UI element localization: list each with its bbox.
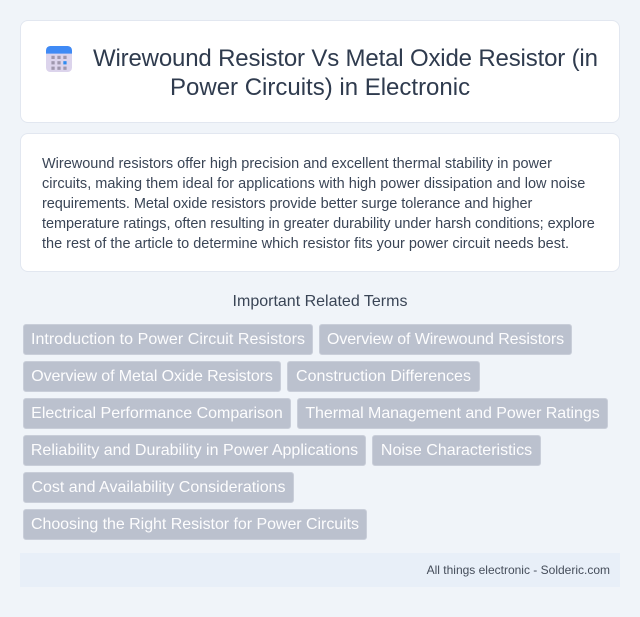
footer text: All things electronic - Solderic.com xyxy=(427,563,610,577)
panel: related term tags xyxy=(23,324,608,540)
icon: calendar grid xyxy=(46,46,72,72)
text block: description: requirements. Metal oxide resistors provide better surge tolerance and higher xyxy=(42,196,532,212)
title: Wirewound Resistor Vs Metal Oxide Resistor (in xyxy=(93,45,598,72)
heading: related terms: Important Related Terms xyxy=(233,293,407,310)
tag xyxy=(297,398,608,429)
tag xyxy=(23,361,281,392)
tag: Overview of Wirewound Resistors xyxy=(327,331,564,348)
tag: Overview of Metal Oxide Resistors xyxy=(31,368,273,385)
text block: description: temperature ratings, often resulting in greater durability under harsh conditions; explore xyxy=(42,216,595,232)
tag xyxy=(372,435,541,466)
text block: description: Wirewound resistors offer high precision and excellent thermal stability in power xyxy=(42,156,552,172)
tag: Cost and Availability Considerations xyxy=(31,479,286,496)
panel: title card xyxy=(20,20,620,123)
text block: description xyxy=(42,156,595,252)
tag xyxy=(287,361,480,392)
tag xyxy=(23,435,366,466)
footer bar xyxy=(20,553,620,587)
title xyxy=(93,45,598,101)
tag: Thermal Management and Power Ratings xyxy=(305,405,600,422)
text block: description: the rest of the article to determine which resistor fits your power circuit needs best. xyxy=(42,236,569,252)
tag xyxy=(23,324,313,355)
tag: Construction Differences xyxy=(296,368,471,385)
title: Power Circuits) in Electronic xyxy=(170,74,470,101)
panel: description xyxy=(20,133,620,272)
tag xyxy=(23,398,291,429)
tag xyxy=(319,324,572,355)
tag: Electrical Performance Comparison xyxy=(31,405,283,422)
tag: Choosing the Right Resistor for Power Circuits xyxy=(31,516,359,533)
tag: Reliability and Durability in Power Applications xyxy=(31,442,358,459)
tag: Noise Characteristics xyxy=(381,442,532,459)
tag xyxy=(23,472,294,503)
tag xyxy=(23,509,367,540)
text block: description: circuits, making them ideal for applications with high power dissipation and low noise xyxy=(42,176,585,192)
tag: Introduction to Power Circuit Resistors xyxy=(31,331,305,348)
